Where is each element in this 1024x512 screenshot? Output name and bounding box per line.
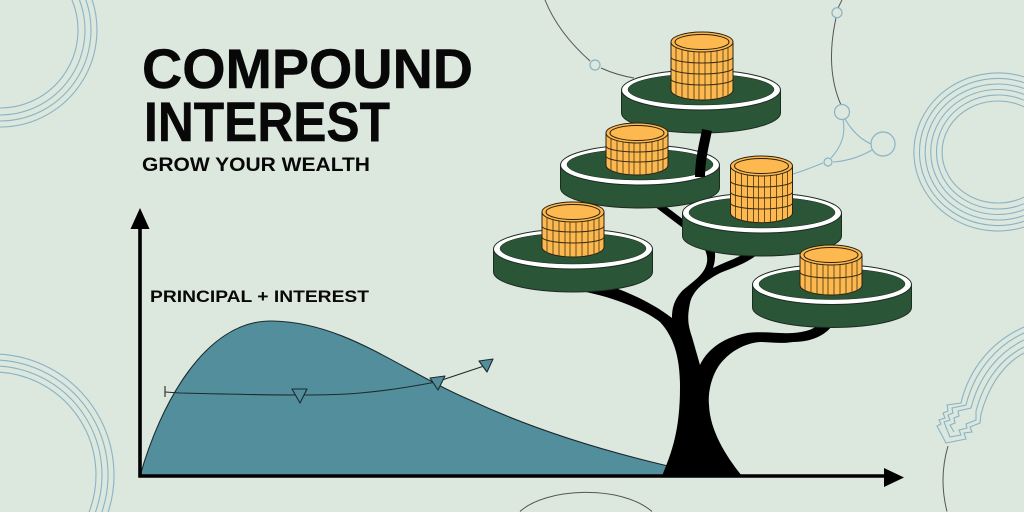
platform: top	[622, 70, 780, 133]
trend line with triangle markers	[165, 359, 493, 403]
branch to second platform	[657, 204, 690, 229]
coin stack: middle right	[730, 156, 792, 223]
platform: middle right	[682, 193, 842, 256]
axis label: PRINCIPAL + INTEREST	[150, 287, 370, 306]
branch between top and second platforms	[700, 130, 707, 177]
tree trunk and branches	[586, 245, 832, 476]
title	[142, 37, 473, 153]
platform: lower right	[752, 264, 912, 327]
title: COMPOUND	[142, 37, 473, 100]
coin stack: left	[542, 202, 604, 257]
platform: left	[494, 229, 652, 292]
subtitle: GROW YOUR WEALTH	[142, 154, 370, 176]
network line: top arc with node	[545, 0, 634, 78]
coin stack: lower right	[800, 245, 862, 295]
chart axes with arrows	[130, 208, 904, 487]
concentric rings: top right	[914, 73, 1024, 231]
decorative arc: bottom right	[943, 446, 948, 512]
network: right nodes and links	[793, 0, 895, 174]
title: INTEREST	[144, 90, 390, 153]
zigzag arcs: bottom right	[937, 327, 1024, 443]
area chart curve	[140, 321, 668, 476]
concentric rings: bottom left	[0, 354, 114, 512]
coin stack: top	[671, 32, 733, 100]
concentric rings: top left	[0, 0, 97, 127]
decorative arc: bottom center	[520, 492, 652, 512]
platform: second	[560, 145, 720, 208]
coin stack: second	[606, 123, 668, 175]
